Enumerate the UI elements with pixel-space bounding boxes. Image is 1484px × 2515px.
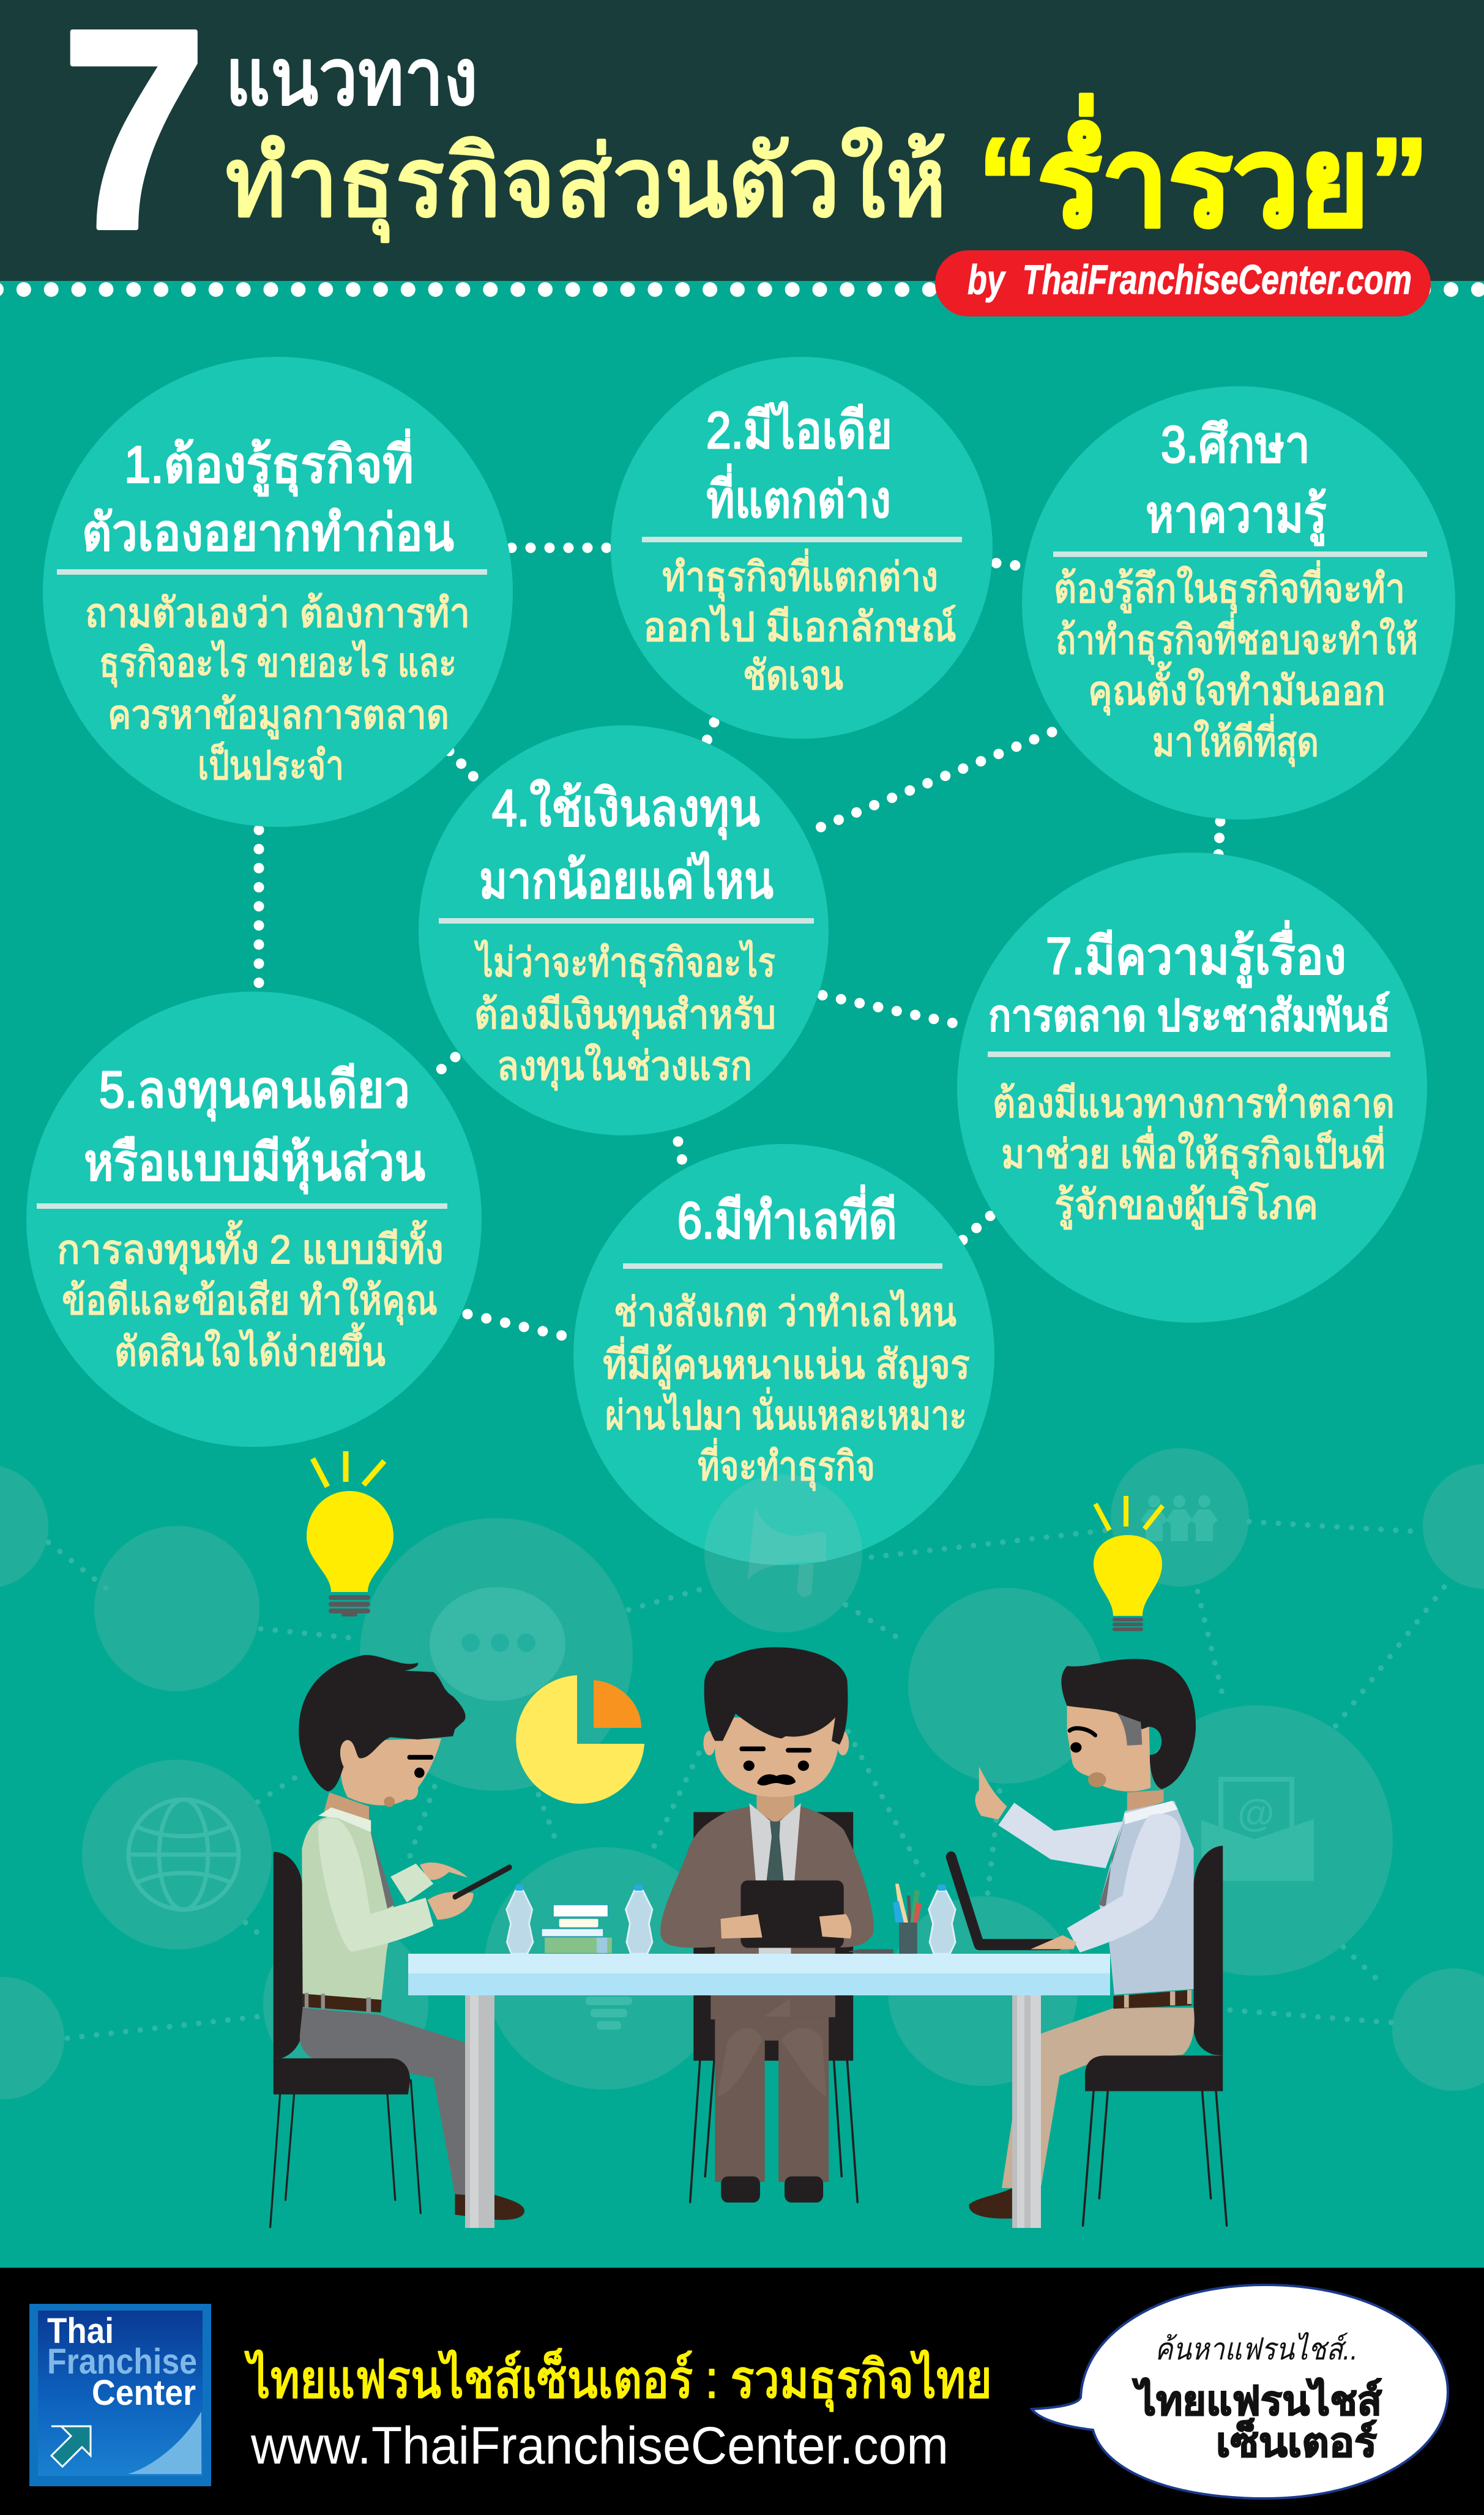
footer band xyxy=(0,2268,1484,2515)
illustration: pen, cup and bottle xyxy=(848,1884,955,1954)
illustration: left man with chair and phone xyxy=(270,1655,524,2227)
icon: people xyxy=(1141,1495,1218,1541)
table xyxy=(408,1954,1110,2228)
icon: light bulb outline xyxy=(586,1997,632,2030)
icon: email envelope: @ xyxy=(1237,1792,1274,1834)
icon: pencil cup xyxy=(893,1884,922,1954)
title line 1: แนวทาง xyxy=(225,32,478,122)
text: step 1 body: ถามตัวเองว่า ต้องการทำ xyxy=(85,590,470,635)
text: step 5 body: การลงทุนทั้ง 2 แบบมีทั้ง xyxy=(57,1220,444,1274)
panel: step 5 xyxy=(26,992,482,1447)
heading: step 4: 4.ใช้เงินลงทุน xyxy=(492,779,760,840)
heading: step 3: หาความรู้ xyxy=(1146,485,1327,545)
text: step 5 body: ข้อดีและข้อเสีย ทำให้คุณ xyxy=(62,1277,438,1325)
text: step 1 body: ควรหาข้อมูลการตลาด xyxy=(108,692,449,739)
panel: step 7 xyxy=(957,853,1427,1323)
text: step 6 body: ที่จะทำธุรกิจ xyxy=(698,1438,875,1491)
icon: bottle right xyxy=(626,1891,652,1954)
text: step 6 body xyxy=(603,1289,970,1491)
icon: left light bulb xyxy=(307,1451,393,1616)
text: step 3 body xyxy=(1054,561,1418,767)
text: step 3 body: มาให้ดีที่สุด xyxy=(1152,714,1319,767)
heading: step 2: 2.มีไอเดีย xyxy=(706,402,892,459)
callout: speech bubble: ไทยแฟรนไชส์ xyxy=(1132,2377,1382,2423)
text: step 1 body: เป็นประจำ xyxy=(198,741,344,788)
footer headline: ไทยแฟรนไชส์เซ็นเตอร์ : รวมธุรกิจไทย xyxy=(245,2349,992,2412)
byline pill xyxy=(935,250,1431,316)
icon: pie chart xyxy=(516,1675,644,1804)
heading: step 1: 1.ต้องรู้ธุรกิจที่ xyxy=(124,429,414,496)
footer url: www.ThaiFranchiseCenter.com xyxy=(250,2416,949,2475)
title xyxy=(61,0,1429,288)
header band xyxy=(0,0,1484,290)
icon: right light bulb xyxy=(1094,1496,1163,1629)
callout: speech bubble: เซ็นเตอร์ xyxy=(1216,2418,1377,2465)
panel: step 2 xyxy=(611,357,993,739)
text: step 4 body: ไม่ว่าจะทำธุรกิจอะไร xyxy=(474,940,775,987)
illustration: water bottles and books xyxy=(507,1885,652,1954)
heading: step 5: หรือแบบมีหุ้นส่วน xyxy=(84,1134,425,1194)
text: step 5 body: ตัดสินใจได้ง่ายขึ้น xyxy=(114,1323,386,1374)
callout: speech bubble: ค้นหาแฟรนไชส์.. xyxy=(1155,2332,1358,2366)
dotted connectors xyxy=(259,548,1220,1336)
background network of faint circles xyxy=(0,1448,1484,2099)
icon: bottle xyxy=(929,1891,955,1954)
text: step 6 body: ผ่านไปมา นั่นแหละเหมาะ xyxy=(605,1388,967,1438)
text: step 1 body: ธุรกิจอะไร ขายอะไร และ xyxy=(99,640,457,687)
heading: step 1 xyxy=(82,429,454,561)
heading: step 5: 5.ลงทุนคนเดียว xyxy=(99,1061,410,1121)
text: step 6 body: ช่างสังเกต ว่าทำเลไหน xyxy=(614,1289,956,1334)
panel: step 6 xyxy=(573,1144,994,1565)
heading: step 6: 6.มีทำเลที่ดี xyxy=(677,1185,897,1249)
text: step 5 body xyxy=(57,1220,444,1374)
callout: speech bubble xyxy=(1032,2285,1448,2498)
panel: step 1 xyxy=(43,357,513,827)
heading: step 2: ที่แตกต่าง xyxy=(706,464,891,528)
title highlight: “ร่ำรวย” xyxy=(978,94,1429,252)
text: step 2 body: ออกไป มีเอกลักษณ์ xyxy=(643,604,956,649)
footer text xyxy=(245,2349,992,2475)
icon: speech bubble xyxy=(430,1587,565,1701)
text: step 4 body: ต้องมีเงินทุนสำหรับ xyxy=(474,992,776,1039)
heading: step 7 xyxy=(988,921,1390,1041)
text: step 7 body: มาช่วย เพื่อให้ธุรกิจเป็นที่ xyxy=(1001,1126,1385,1179)
text: step 7 body xyxy=(993,1080,1395,1230)
icon: pen xyxy=(848,1949,893,1954)
text: step 3 body: ต้องรู้ลึกในธุรกิจที่จะทำ xyxy=(1054,561,1405,613)
title line 2: ทำธุรกิจส่วนตัวให้ xyxy=(225,127,947,242)
panel: step 3 xyxy=(1022,386,1455,820)
text: step 4 body xyxy=(474,940,776,1091)
icon: globe xyxy=(129,1799,239,1910)
heading: step 3 xyxy=(1146,416,1327,545)
heading: step 5 xyxy=(84,1061,425,1194)
heading: step 4 xyxy=(479,779,774,909)
text: step 7 body: ต้องมีแนวทางการทำตลาด xyxy=(993,1080,1395,1126)
heading: step 7: การตลาด ประชาสัมพันธ์ xyxy=(988,992,1390,1041)
text: step 2 body xyxy=(643,549,956,698)
heading: step 7: 7.มีความรู้เรื่อง xyxy=(1046,921,1346,987)
icon: bottle beside center man xyxy=(625,1885,652,1954)
text: step 2 body: ชัดเจน xyxy=(743,652,843,698)
logo: Franchise xyxy=(47,2342,197,2382)
illustration: right man with laptop xyxy=(951,1659,1227,2225)
icon: books xyxy=(542,1905,612,1953)
heading: step 4: มากน้อยแค่ไหน xyxy=(479,851,774,909)
text: step 1 body xyxy=(85,590,470,788)
heading: step 1: ตัวเองอยากทำก่อน xyxy=(82,504,454,561)
icon: bottle left xyxy=(507,1891,533,1954)
text: step 4 body: ลงทุนในช่วงแรก xyxy=(497,1043,752,1091)
text: step 2 body: ทำธุรกิจที่แตกต่าง xyxy=(662,549,938,602)
icon: logo arrow xyxy=(51,2426,91,2467)
logo xyxy=(29,2304,211,2486)
panel: step 4 xyxy=(419,725,829,1135)
text: step 6 body: ที่มีผู้คนหนาแน่น สัญจร xyxy=(603,1337,970,1389)
icon: email envelope xyxy=(1201,1777,1314,1881)
illustration: center man with tablet xyxy=(660,1647,874,2203)
icon: megaphone circle xyxy=(704,1474,862,1632)
text: step 3 body: คุณตั้งใจทำมันออก xyxy=(1088,662,1385,716)
text: step 7 body: รู้จักของผู้บริโภค xyxy=(1054,1182,1318,1230)
text: step 3 body: ถ้าทำธุรกิจที่ชอบจะทำให้ xyxy=(1056,612,1418,665)
heading: step 2 xyxy=(706,402,892,528)
logo: Center xyxy=(92,2373,196,2413)
logo: Thai xyxy=(47,2311,114,2351)
heading: step 3: 3.ศึกษา xyxy=(1161,416,1310,473)
